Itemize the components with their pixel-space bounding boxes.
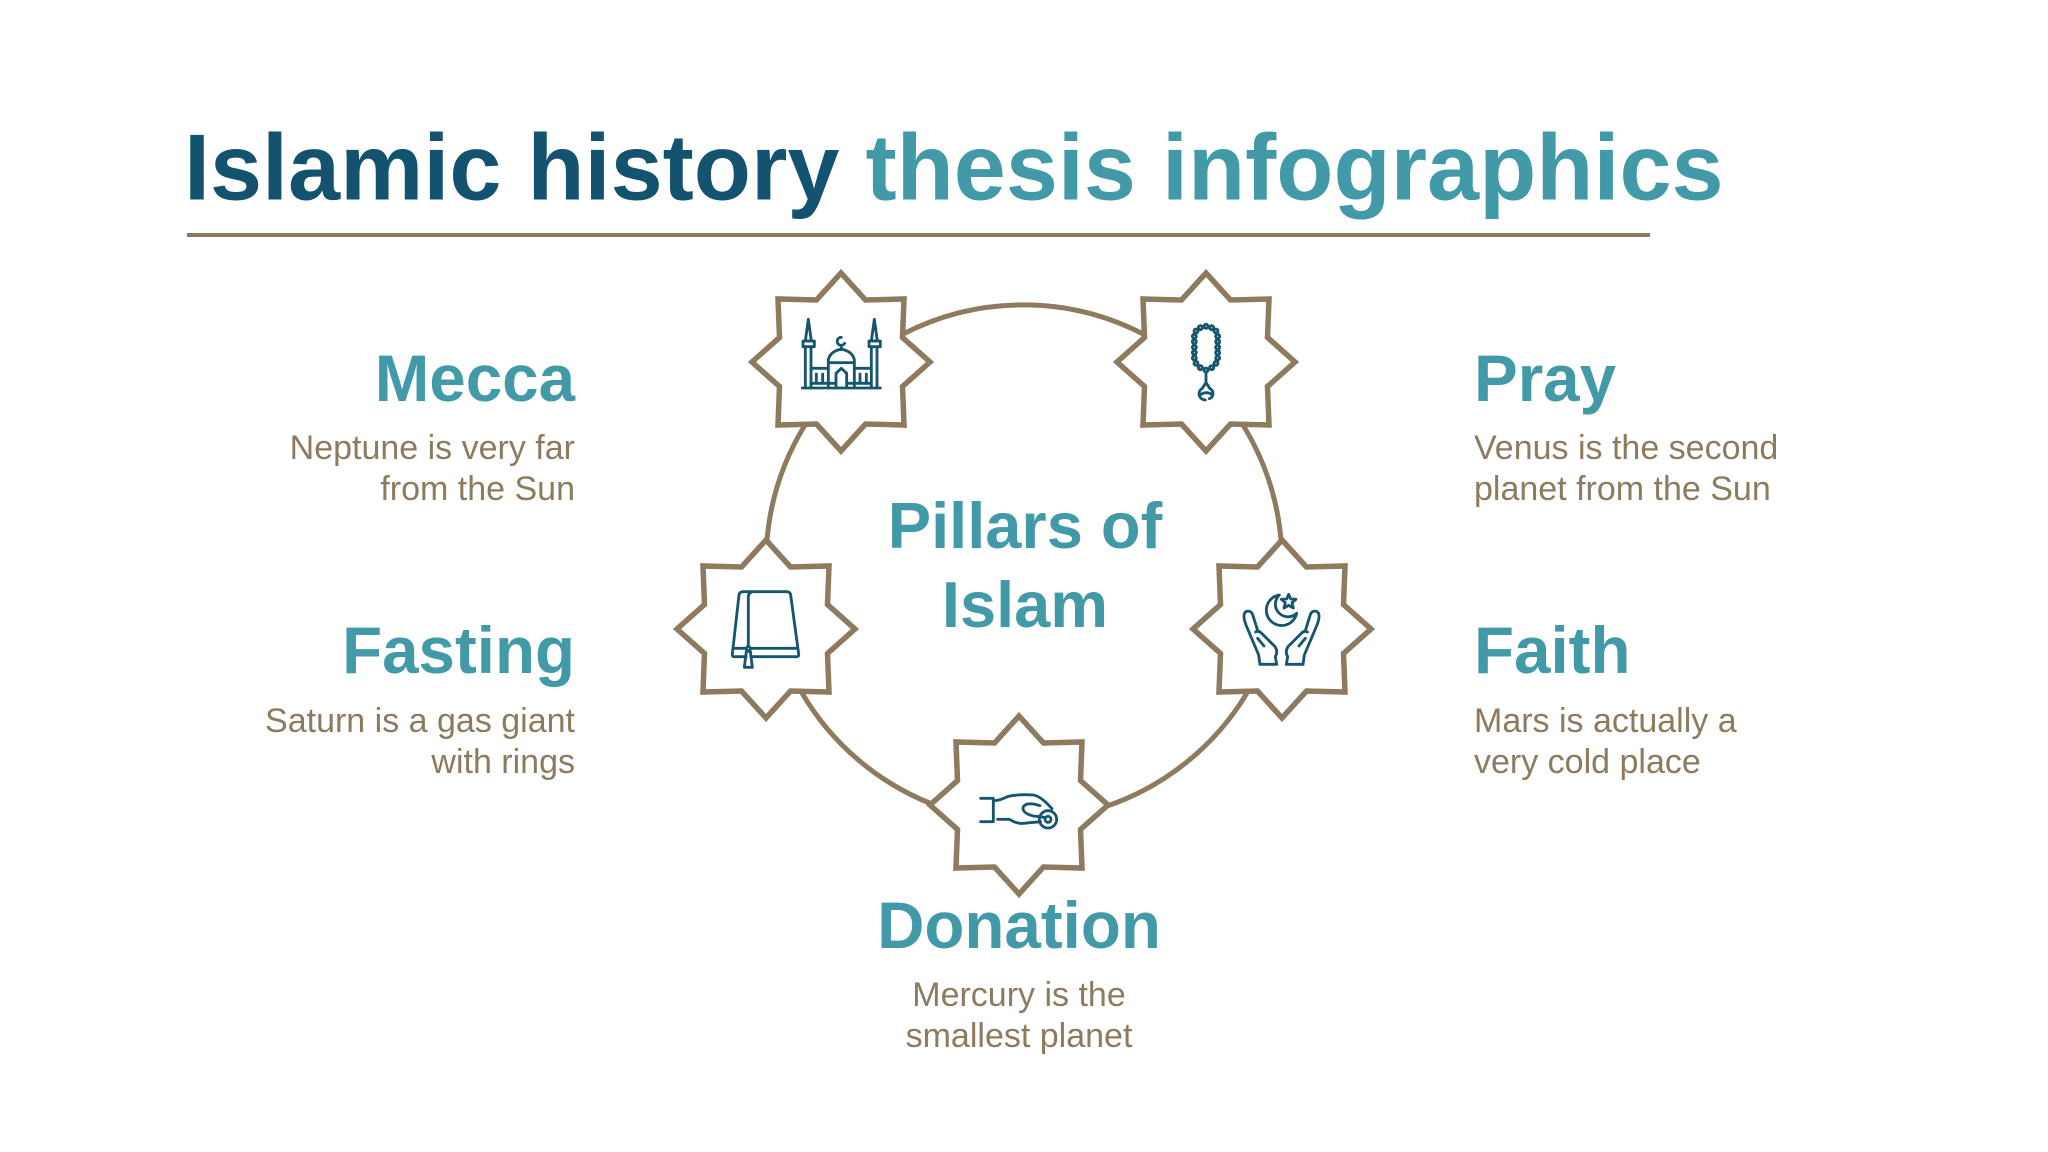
block: Mecca: from the Sun: [380, 470, 575, 508]
center label: Pillars of: [888, 489, 1163, 562]
block: Donation: smallest planet: [906, 1017, 1133, 1055]
star: Donation: [930, 716, 1108, 894]
center label: Islam: [942, 568, 1108, 641]
block: Mecca: Neptune is very far: [290, 429, 575, 467]
block: Mecca: [290, 342, 576, 508]
title: Islamic history thesis infographics: [184, 114, 1724, 220]
block: Faith: Faith: [1474, 614, 1630, 687]
block: Pray: Venus is the second: [1474, 429, 1778, 467]
center label: [888, 489, 1163, 641]
ring connecting the pillars: [767, 305, 1281, 806]
block: Pray: Pray: [1474, 342, 1617, 415]
block: Fasting: Fasting: [342, 614, 575, 687]
star: Mecca: [752, 273, 930, 451]
block: Pray: [1474, 342, 1778, 508]
block: Fasting: Saturn is a gas giant: [265, 702, 576, 740]
block: Pray: planet from the Sun: [1474, 470, 1771, 508]
star: Pray: [1117, 273, 1295, 451]
block: Mecca: Mecca: [375, 342, 576, 415]
block: Donation: [877, 889, 1161, 1055]
block: Faith: Mars is actually a: [1474, 702, 1737, 740]
block: Faith: [1474, 614, 1737, 781]
title underline: [187, 233, 1650, 237]
block: Fasting: [265, 614, 576, 781]
block: Faith: very cold place: [1474, 743, 1701, 781]
icon: hands with crescent: [1244, 594, 1319, 664]
star: Fasting: [677, 540, 855, 718]
icon: prayer beads: [1192, 324, 1220, 400]
icon: mosque: [802, 319, 880, 388]
block: Fasting: with rings: [430, 743, 575, 781]
block: Donation: Donation: [877, 889, 1161, 962]
icon: hand giving coin: [981, 795, 1057, 828]
block: Donation: Mercury is the: [912, 976, 1126, 1014]
star: Faith: [1193, 540, 1371, 718]
icon: holy book: [732, 592, 799, 667]
